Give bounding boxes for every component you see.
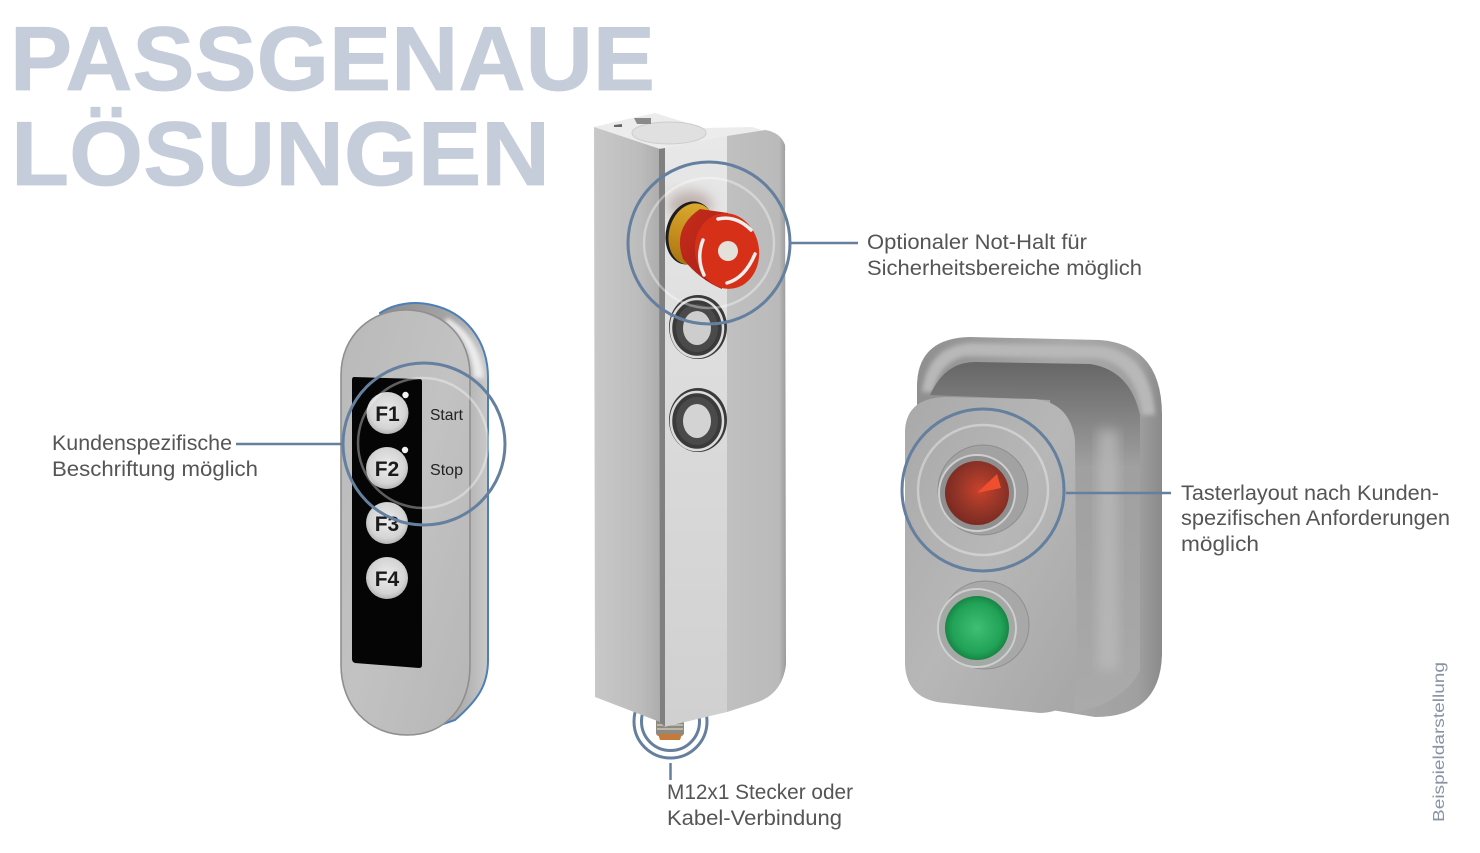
status LEDs	[402, 392, 409, 453]
callout: M12x1: M12x1 Stecker oder	[667, 781, 853, 804]
device: key fob	[341, 303, 488, 735]
fob front face	[341, 310, 470, 735]
box front face	[905, 397, 1077, 713]
title	[10, 9, 655, 205]
M12 connector	[656, 716, 684, 740]
leader line: emergency stop	[790, 242, 858, 244]
enclosure top	[594, 113, 786, 150]
key F1: F1	[375, 403, 400, 426]
title: PASSGENAUE	[10, 9, 655, 110]
green lamp	[938, 581, 1029, 669]
plate rim	[922, 343, 1155, 415]
enclosure right face	[727, 130, 786, 712]
label stop: Stop	[430, 462, 463, 479]
key F4: F4	[375, 568, 400, 591]
callout: Tasterlayout: Tasterlayout nach Kunden-	[1181, 482, 1439, 505]
device: tall enclosure	[594, 113, 786, 727]
back plate	[917, 337, 1162, 717]
highlight circle: red lamp	[902, 409, 1064, 571]
device: button box	[905, 337, 1162, 717]
top cap detail	[614, 118, 706, 144]
box side highlight	[1098, 430, 1118, 670]
label start: Start	[430, 407, 464, 424]
leader line: button box	[1066, 492, 1171, 494]
red cap body	[680, 209, 728, 289]
leader line: connector	[669, 763, 672, 780]
callout: Kundenspezifische Beschriftung	[52, 432, 258, 481]
emergency stop button	[659, 191, 765, 294]
callout: Not-Halt: Optionaler Not-Halt für	[867, 231, 1087, 254]
note: Beispieldarstellung: Beispieldarstellung	[1431, 662, 1448, 822]
red lamp	[938, 445, 1028, 535]
fob shine	[444, 318, 484, 378]
enclosure centre face	[664, 136, 727, 727]
push button upper	[669, 295, 727, 359]
callout: Tasterlayout	[1181, 482, 1450, 556]
box side	[930, 362, 1140, 713]
callout: Tasterlayout: möglich	[1181, 533, 1259, 556]
black label panel	[352, 377, 422, 668]
callout: Not-Halt	[867, 231, 1142, 280]
red cap head	[689, 208, 765, 294]
yellow collar	[659, 196, 721, 270]
callout: Kundenspezifische Beschriftung: Beschriftung möglich	[52, 458, 258, 481]
highlight circle: emergency stop	[628, 162, 790, 324]
leader line: fob	[236, 443, 343, 445]
key F3: F3	[375, 513, 399, 536]
title: LÖSUNGEN	[11, 104, 550, 205]
callout: Kundenspezifische Beschriftung: Kundenspezifische	[52, 432, 232, 455]
fob back body with blue edge	[380, 303, 488, 732]
callout: M12x1	[667, 781, 853, 830]
highlight arcs: connector	[634, 685, 707, 758]
key F1	[366, 392, 408, 434]
enclosure left face	[594, 127, 660, 722]
key F4	[366, 557, 408, 599]
callout: Tasterlayout: spezifischen Anforderungen	[1181, 507, 1450, 530]
callout: M12x1: Kabel-Verbindung	[667, 807, 842, 830]
key F2: F2	[375, 458, 399, 481]
highlight circle: fob labels	[343, 363, 505, 525]
key F3	[366, 502, 408, 544]
enclosure edge	[659, 148, 665, 727]
callout: Not-Halt: Sicherheitsbereiche möglich	[867, 257, 1142, 280]
key F2	[366, 447, 408, 489]
button shadow	[668, 191, 712, 219]
push button lower	[669, 388, 727, 452]
